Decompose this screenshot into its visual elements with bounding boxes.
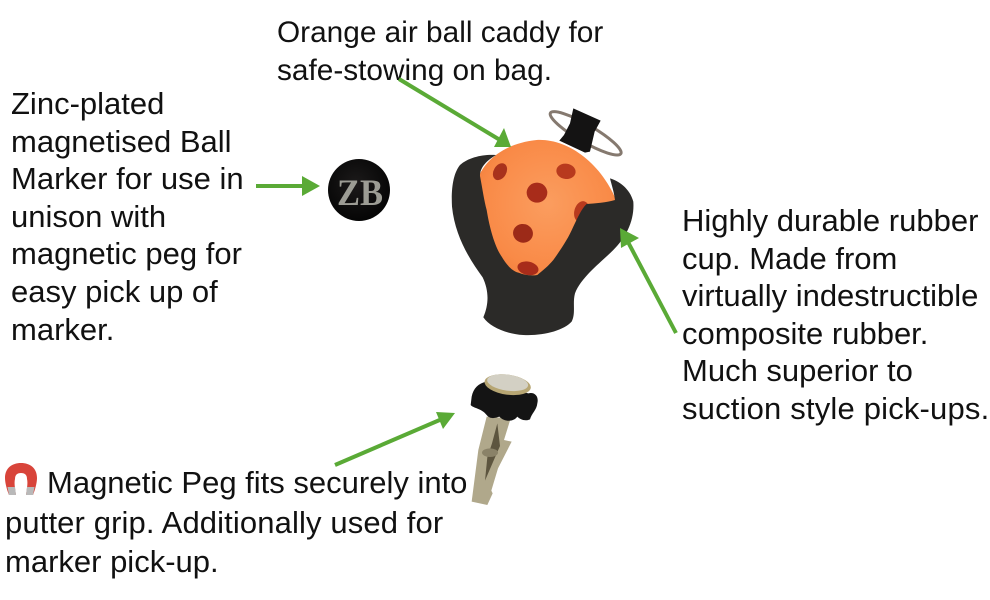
icon: rubber cup with orange ball and key ring [452,105,633,335]
arrow: to orange ball [399,79,511,147]
text: zinc-plated ball marker: marker. [11,312,114,347]
black tab [559,108,601,153]
orange ball [477,140,618,282]
text: magnetic peg: putter grip. Additionally used for [5,504,443,540]
text: zinc-plated ball marker: magnetic peg for [11,236,242,271]
text: zinc-plated ball marker: magnetised Ball [11,124,232,159]
text: rubber cup: Much superior to [682,353,913,388]
magnet disc [483,372,532,398]
text: rubber cup: cup. Made from [682,241,897,276]
text: rubber cup: suction style pick-ups. [682,391,989,426]
text: zinc-plated ball marker: easy pick up of [11,274,218,309]
black knob [471,382,538,421]
text: magnetic peg [5,465,467,579]
arrow: to ball marker [256,176,320,196]
icon: ZB ball marker: ZB [337,173,383,214]
text: zinc-plated ball marker: unison with [11,199,166,234]
text: orange air ball caddy [277,16,603,87]
arrow: to magnetic peg [335,412,455,465]
text: magnetic peg: marker pick-up. [5,544,219,579]
text: orange air ball caddy: safe-stowing on bag. [277,54,552,87]
text: magnetic peg: Magnetic Peg fits securely into [47,465,467,500]
text: rubber cup: Highly durable rubber [682,203,978,238]
text: rubber cup: composite rubber. [682,316,928,351]
text: rubber cup: virtually indestructible [682,278,978,313]
peg shaft [472,417,512,505]
key ring [546,105,625,161]
text: orange air ball caddy: Orange air ball caddy for [277,16,603,49]
text: zinc-plated ball marker: Marker for use in [11,161,244,196]
icon: magnetic peg [471,372,538,505]
text: zinc-plated ball marker: Zinc-plated [11,86,164,121]
icon: horseshoe magnet [5,463,37,495]
text: rubber cup [682,203,989,426]
arrow: to rubber cup [620,228,676,333]
rubber cup [452,155,633,335]
icon: ZB ball marker [328,159,390,221]
text: zinc-plated ball marker [11,86,244,347]
